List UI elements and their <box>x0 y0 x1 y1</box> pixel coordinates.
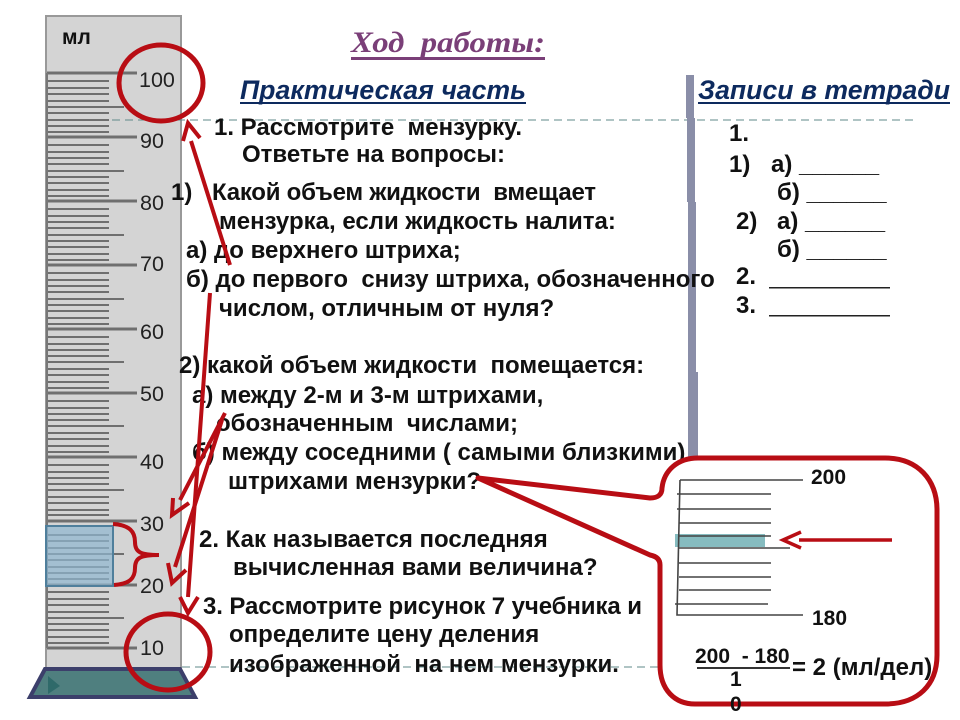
scale numbers: 60 <box>140 320 164 344</box>
text block: question 1: числом, отличным от нуля? <box>219 295 554 322</box>
scale spine <box>46 73 48 648</box>
minor scale ticks <box>46 81 109 643</box>
heading: notebook entries: Записи в тетради <box>698 75 950 105</box>
cylinder base <box>30 669 195 697</box>
heading: practical part: Практическая часть <box>240 75 526 105</box>
scale numbers: 80 <box>140 191 164 215</box>
text block: notebook answers: 1) <box>729 151 750 178</box>
text block: step 1 <box>214 114 522 168</box>
text block: question 2: а) между 2-м и 3-м штрихами, <box>192 382 543 409</box>
scale numbers: 10 <box>140 636 164 660</box>
formula <box>695 645 932 716</box>
text block: notebook answers: 2. <box>736 263 756 290</box>
text block: step 2: вычисленная вами величина? <box>233 554 598 581</box>
text block: notebook answers: б) ______ <box>777 236 887 263</box>
scale numbers: 20 <box>140 574 164 598</box>
text block: question 1: мензурка, если жидкость налита: <box>219 208 616 235</box>
arrow: to 30 <box>172 413 225 515</box>
arrow: to liquid level <box>783 532 892 548</box>
scale numbers: 50 <box>140 382 164 406</box>
text block: question 1: а) до верхнего штриха; <box>186 237 461 264</box>
cylinder body <box>46 16 181 669</box>
scale numbers: 100 <box>139 68 175 92</box>
text block: question 2: обозначенным числами; <box>216 410 518 437</box>
text block: question 2: штрихами мензурки? <box>228 468 481 495</box>
text block: notebook answers <box>729 120 890 319</box>
text block: notebook answers: а) ______ <box>777 208 886 235</box>
arrow: to 20 <box>168 420 222 583</box>
scale numbers: 30 <box>140 512 164 536</box>
text block: step 3: изображенной на нем мензурки. <box>229 651 619 678</box>
callout outline <box>478 458 937 704</box>
circle: top mark <box>119 45 203 121</box>
text block: question 2: 2) какой объем жидкости помещается: <box>179 352 644 379</box>
text block: step 3: определите цену деления <box>229 621 539 648</box>
text block: step 1: 1. Рассмотрите мензурку. <box>214 114 522 141</box>
text block: notebook answers: 1. <box>729 120 749 147</box>
circle: bottom mark <box>126 614 210 690</box>
scale numbers: 90 <box>140 129 164 153</box>
text block: step 2: 2. Как называется последняя <box>199 526 548 553</box>
panel: measuring cylinder <box>30 16 195 697</box>
text block: question 1: Какой объем жидкости вмещает <box>212 179 596 206</box>
text block: question 2 <box>179 352 685 495</box>
formula: 200 - 180 <box>695 645 790 668</box>
text block: notebook answers: 3. <box>736 292 756 319</box>
text block: step 1: Ответьте на вопросы: <box>242 141 505 168</box>
text block: step 3 <box>203 593 642 678</box>
arrow: to top line <box>183 123 230 265</box>
scale numbers: 70 <box>140 252 164 276</box>
brace <box>113 524 159 585</box>
detail scale labels: 200 <box>811 466 846 489</box>
text block: question 2: б) между соседними ( самыми близкими) <box>192 439 685 466</box>
arrow: to step mark 3 <box>180 293 210 613</box>
text block: question 1: б) до первого снизу штриха, обозначенного <box>186 266 715 293</box>
title: Ход работы: <box>350 26 545 59</box>
divider column <box>686 75 698 462</box>
text block: notebook answers: 2) <box>736 208 757 235</box>
text block: step 3: 3. Рассмотрите рисунок 7 учебника и <box>203 593 642 620</box>
detail scale labels: 180 <box>812 607 847 630</box>
formula: = 2 (мл/дел) <box>792 654 932 681</box>
detail scale <box>675 480 803 615</box>
major scale ticks <box>47 73 137 648</box>
liquid level <box>675 534 765 547</box>
scale numbers: 40 <box>140 450 164 474</box>
callout: scale detail <box>478 458 937 716</box>
text block: question 1: 1) <box>171 179 192 206</box>
text block: question 1 <box>171 179 715 322</box>
text block: notebook answers: а) ______ <box>771 151 880 178</box>
detail scale labels <box>811 466 847 630</box>
annotations: circles, brace, arrows <box>113 45 230 690</box>
formula: 0 <box>730 693 742 716</box>
formula: 1 <box>730 668 742 691</box>
text block: step 2 <box>199 526 598 581</box>
text block: notebook answers: б) ______ <box>777 179 887 206</box>
scale numbers <box>139 68 175 660</box>
liquid highlight between 20 and 30 <box>46 526 113 586</box>
dashed guide lines <box>112 120 913 667</box>
unit label: мл <box>62 26 91 49</box>
base play mark <box>48 676 60 694</box>
half-decade ticks <box>47 107 124 618</box>
